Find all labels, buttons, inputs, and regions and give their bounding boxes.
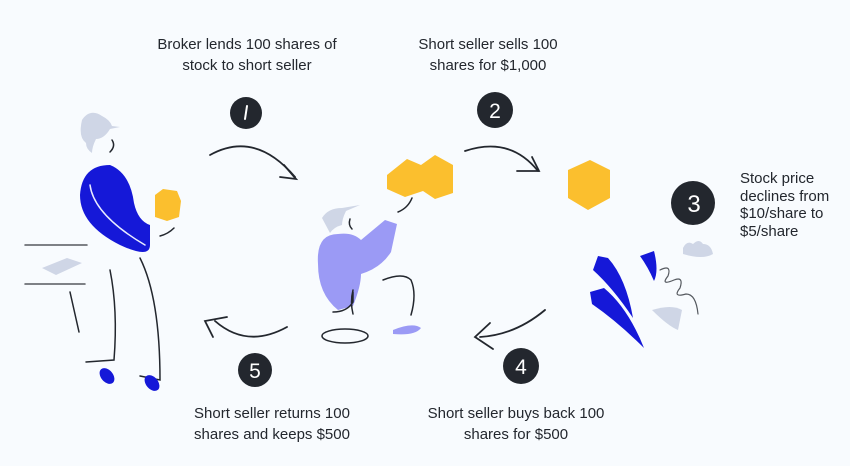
text: step 5: Short seller returns 100	[194, 405, 350, 422]
text: step 3: $5/share	[740, 222, 798, 240]
figure: falling price	[590, 241, 713, 348]
arrow: step 4	[475, 310, 545, 349]
text: step 2: shares for $1,000	[430, 57, 546, 74]
figure: short seller	[318, 155, 453, 343]
text: step 4	[428, 405, 604, 443]
badge 3: 3	[687, 191, 701, 218]
badge 5: 5	[249, 360, 261, 383]
text: step 2: Short seller sells 100	[418, 36, 558, 53]
badge 2: 2	[489, 100, 501, 123]
arrow: step 5	[205, 317, 287, 337]
badge 3	[671, 181, 715, 225]
text: step 3: Stock price	[740, 170, 814, 187]
arrow: step 1	[210, 146, 296, 179]
text: step 3	[740, 170, 829, 240]
text: step 1: Broker lends 100 shares of	[157, 36, 337, 53]
badge 2	[477, 92, 513, 128]
text: step 3: $10/share to	[740, 205, 823, 222]
text: step 4: shares for $500	[464, 426, 568, 443]
badge 5	[238, 353, 272, 387]
figure: broker	[25, 113, 181, 394]
text: step 1: stock to short seller	[182, 57, 312, 74]
badge 4	[503, 348, 539, 384]
text: step 3: declines from	[740, 188, 829, 204]
text: step 1	[157, 36, 337, 74]
icon: cube	[568, 160, 610, 210]
text: step 5	[194, 405, 350, 443]
arrow: step 2	[465, 146, 539, 171]
text: step 4: Short seller buys back 100	[428, 405, 604, 422]
badge 1	[230, 97, 262, 129]
text: step 2	[418, 36, 558, 74]
text: step 5: shares and keeps $500	[194, 426, 350, 443]
badge 4: 4	[515, 356, 527, 379]
